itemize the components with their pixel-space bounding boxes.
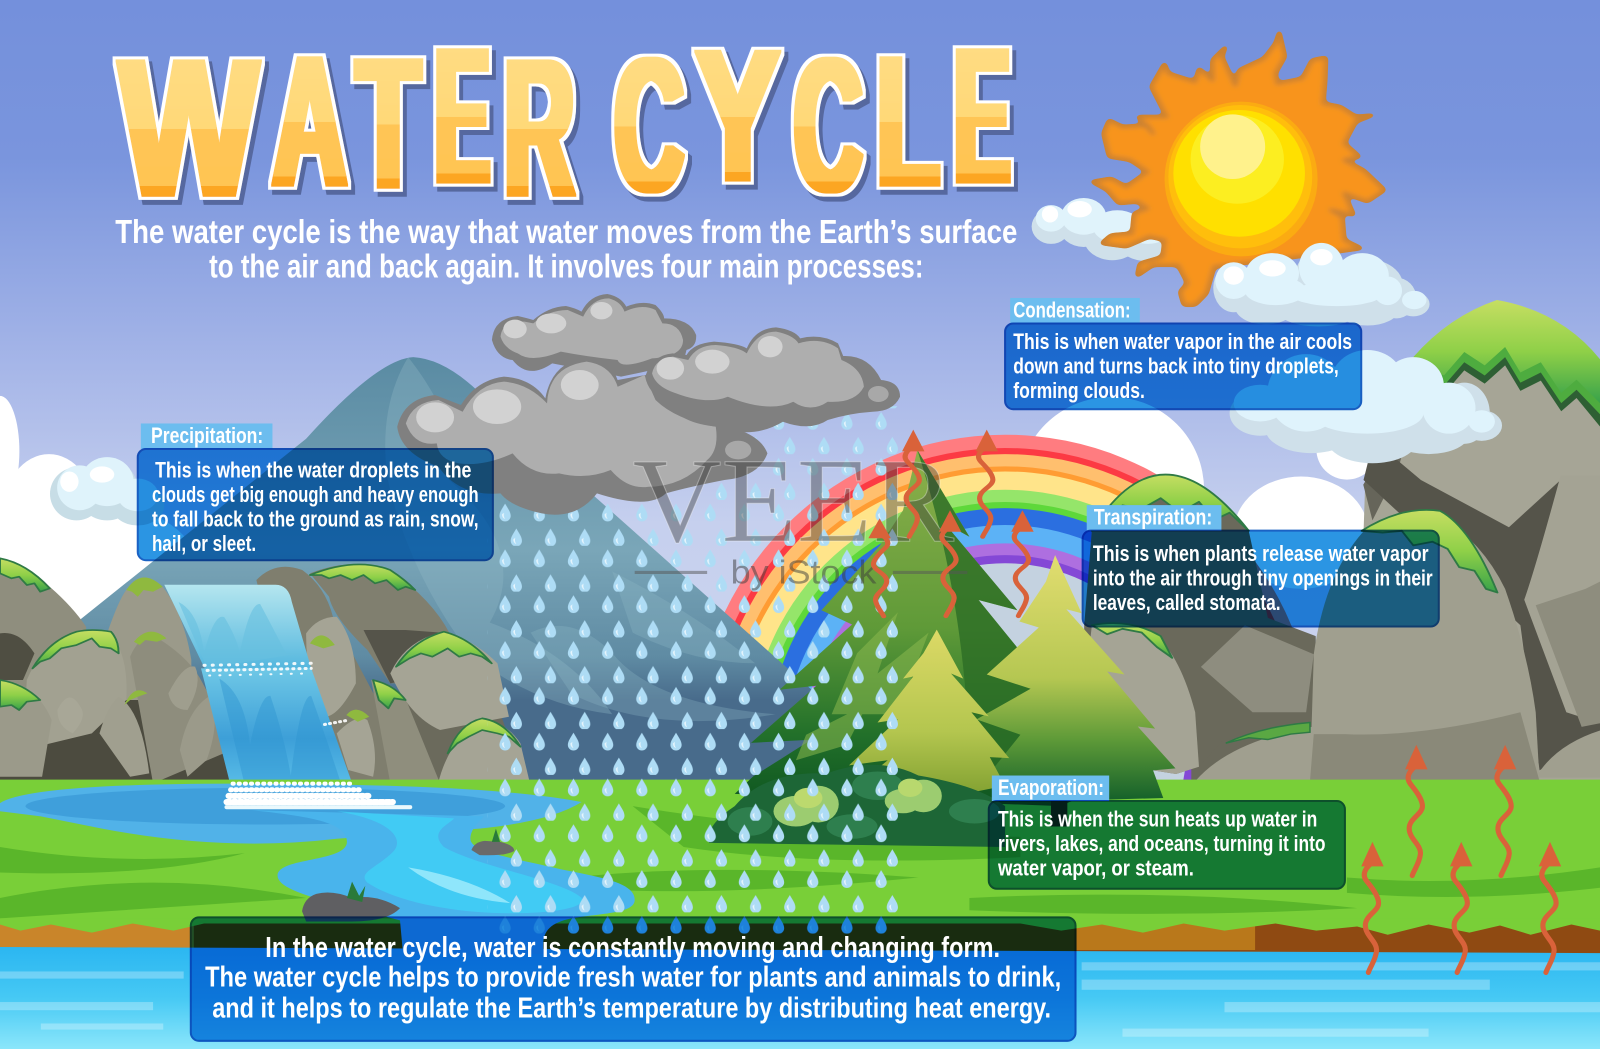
precipitation box — [138, 449, 493, 560]
intro text: to the air and back again. It involves four main processes: — [209, 249, 923, 286]
summary box — [191, 917, 1076, 1041]
transpiration label: Transpiration: — [1094, 505, 1212, 530]
panel: condensation — [1005, 297, 1361, 409]
foam — [204, 663, 347, 724]
intro text — [115, 214, 1017, 286]
summary text: In the water cycle, water is constantly moving and changing form. — [265, 932, 1000, 964]
far right rock — [1363, 300, 1600, 786]
title — [119, 8, 1010, 238]
watermark: VEER — [633, 435, 955, 568]
waterfall — [164, 585, 353, 786]
sun — [1092, 32, 1385, 305]
evaporation box — [989, 801, 1345, 889]
riverbank — [0, 918, 1600, 954]
arrow 4 — [1450, 842, 1472, 972]
arrow 1 — [1405, 745, 1428, 876]
condensation text: forming clouds. — [1013, 378, 1145, 403]
transpiration text: into the air through tiny openings in their — [1093, 566, 1433, 591]
transpiration arrows — [868, 430, 1034, 616]
watermark: by iStock — [731, 555, 877, 592]
right rock group — [1084, 440, 1600, 781]
waterfall splash — [227, 784, 410, 807]
rain drops — [488, 406, 906, 934]
cloud beneath condensation box — [1230, 350, 1502, 463]
arrow 2 — [1494, 745, 1516, 876]
cloud left of the sun — [1032, 198, 1177, 261]
condensation text: down and turns back into tiny droplets, — [1013, 353, 1339, 378]
precipitation text: to fall back to the ground as rain, snow, — [152, 507, 479, 532]
title: Y — [696, 11, 780, 222]
low rock — [1195, 727, 1312, 781]
right rock cluster — [256, 564, 530, 783]
moss: right cluster — [310, 564, 520, 753]
river — [252, 810, 635, 954]
rock behind transpiration — [1084, 475, 1318, 774]
text: E — [954, 8, 1010, 225]
title: T — [356, 19, 420, 228]
title: R — [504, 18, 574, 238]
condensation text — [1013, 329, 1352, 403]
bush — [708, 765, 1005, 847]
evaporation text — [997, 807, 1326, 881]
arrow 4 — [939, 510, 961, 616]
summary text — [205, 932, 1061, 1024]
small cloud far left — [50, 457, 164, 526]
cloud 2 — [645, 327, 900, 432]
intro text: The water cycle is the way that water moves from the Earth’s surface — [115, 214, 1017, 251]
summary text: The water cycle helps to provide fresh water for plants and animals to drink, — [205, 962, 1061, 994]
left rock cluster — [0, 558, 233, 783]
river stones — [302, 829, 514, 921]
pond — [0, 784, 582, 844]
transpiration box — [1083, 531, 1439, 627]
summary text: and it helps to regulate the Earth’s temperature by distributing heat energy. — [212, 992, 1051, 1024]
title: C — [794, 19, 862, 232]
transpiration text: This is when plants release water vapor — [1093, 541, 1429, 566]
arrow 1 — [902, 430, 924, 537]
rainbow — [695, 435, 1315, 1049]
precipitation label: Precipitation: — [151, 423, 263, 448]
cloud 1 — [492, 294, 696, 377]
precipitation text — [152, 458, 479, 556]
title: C — [614, 19, 684, 232]
arrow 3 — [1361, 842, 1384, 972]
precipitation text: This is when the water droplets in the — [155, 458, 471, 483]
evaporation text: rivers, lakes, and oceans, turning it into — [998, 831, 1326, 856]
panel: summary — [191, 917, 1076, 1041]
cloud 3 — [397, 357, 767, 515]
moss: left cluster — [0, 558, 166, 710]
big green tree — [735, 450, 1102, 827]
ground — [0, 780, 1600, 958]
moss cap: top right — [1413, 300, 1600, 427]
evaporation text: water vapor, or steam. — [997, 856, 1194, 881]
condensation label: Condensation: — [1013, 297, 1131, 322]
front rock — [1310, 513, 1540, 781]
evaporation text: This is when the sun heats up water in — [998, 807, 1317, 832]
condensation box — [1005, 323, 1361, 409]
evaporation arrows — [1361, 745, 1561, 972]
arrow 3 — [1011, 510, 1034, 616]
lake at the bottom — [0, 947, 1600, 1049]
cloud beneath the sun — [1213, 243, 1430, 327]
title: L — [877, 17, 940, 226]
panel: transpiration — [1083, 505, 1439, 627]
evaporation label: Evaporation: — [998, 775, 1104, 800]
arrow 2 — [976, 430, 998, 537]
title: W — [119, 18, 258, 238]
storm clouds — [397, 294, 900, 515]
yellow-green tree — [977, 555, 1176, 801]
panel: precipitation — [138, 423, 493, 560]
precipitation text: clouds get big enough and heavy enough — [152, 482, 479, 507]
arrow 5 — [868, 518, 891, 616]
small yellow-green tree — [849, 630, 1009, 799]
white background clouds — [0, 396, 1378, 638]
condensation text: This is when water vapor in the air cools — [1013, 329, 1352, 354]
precipitation text: hail, or sleet. — [152, 531, 256, 556]
transpiration text: leaves, called stomata. — [1093, 590, 1281, 615]
transpiration text — [1093, 541, 1433, 615]
panel: evaporation — [989, 775, 1345, 889]
title: A — [272, 17, 347, 226]
title: E — [435, 8, 490, 225]
arrow 5 — [1539, 842, 1561, 972]
mountain — [77, 357, 816, 786]
